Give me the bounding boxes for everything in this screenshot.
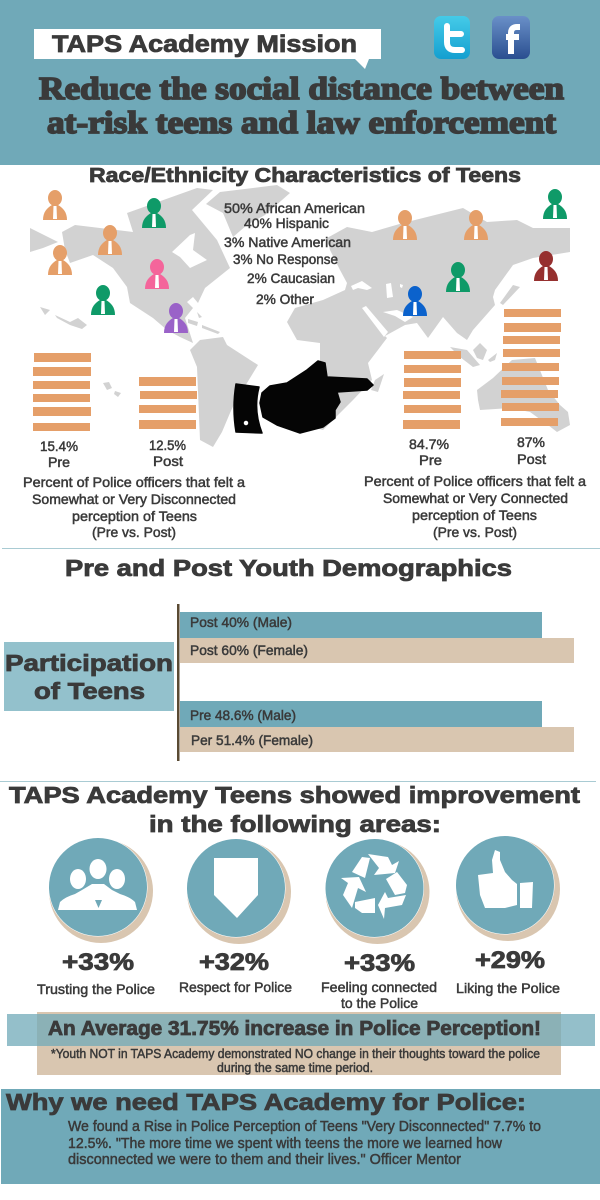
map: inland water <box>172 233 413 337</box>
bar: connected post 87% <box>501 309 561 426</box>
mission statement <box>39 70 564 140</box>
labels: disconnected bars: 12.5% <box>149 437 186 453</box>
caption: disconnected perception: (Pre vs. Post) <box>92 524 176 540</box>
labels: disconnected bars <box>40 437 186 470</box>
icon: twitter <box>434 16 470 59</box>
participation label box: Participation <box>5 650 173 676</box>
metric: feeling connected: to the Police <box>341 995 418 1011</box>
participation label box <box>4 642 174 711</box>
race and ethnicity percentages: 40% Hispanic <box>244 215 329 231</box>
participation bar chart <box>177 604 574 761</box>
footnote: during the same time period. <box>217 1060 373 1075</box>
metric: trusting the police <box>37 838 155 997</box>
metric: liking the police: Liking the Police <box>456 980 560 996</box>
quote paragraph: 12.5%. "The more time we spent with teens the more we learned how <box>68 1135 502 1152</box>
panel: why we need TAPS: Why we need TAPS Academy for Police: <box>6 1089 526 1115</box>
metric: respect for police: Respect for Police <box>179 979 292 995</box>
caption: disconnected perception: perception of Teens <box>72 508 197 524</box>
bar: connected pre 84.7% <box>403 351 461 429</box>
bar: pre female <box>180 727 574 752</box>
metric: feeling connected <box>321 838 437 1011</box>
footnote: *Youth NOT in TAPS Academy demonstrated NO change in their thoughts toward the police <box>51 1046 540 1061</box>
caption: connected perception: perception of Teens <box>412 507 537 523</box>
callout: average increase <box>7 1012 595 1075</box>
bar: disconnected pre 15.4% <box>33 353 91 431</box>
world map <box>30 185 570 447</box>
labels: disconnected bars: Post <box>153 453 183 469</box>
metric: feeling connected: Feeling connected <box>321 979 437 995</box>
icon: recycle arrows <box>341 854 407 919</box>
quote paragraph: We found a Rise in Police Perception of Teens "Very Disconnected" 7.7% to <box>68 1118 541 1135</box>
metric: liking the police <box>456 836 560 996</box>
speech bubble heading: TAPS Academy Mission <box>52 31 357 58</box>
race and ethnicity percentages: 3% No Response <box>233 251 338 267</box>
labels: connected bars: Pre <box>419 452 442 468</box>
caption: disconnected perception <box>23 474 245 540</box>
heading: improvement areas: TAPS Academy Teens showed improvement <box>9 782 580 808</box>
labels: connected bars: Post <box>517 451 546 467</box>
race and ethnicity percentages: 3% Native American <box>224 234 351 250</box>
metric: trusting the police: Trusting the Police <box>37 981 155 997</box>
race and ethnicity percentages: 50% African American <box>224 200 365 216</box>
bar: post male: Post 40% (Male) <box>190 614 292 630</box>
mission statement: at-risk teens and law enforcement <box>47 104 556 140</box>
heading: improvement areas <box>9 782 580 837</box>
bar: pre male <box>180 701 542 727</box>
bar: post female <box>180 638 574 663</box>
metric: feeling connected: +33% <box>344 950 415 977</box>
race and ethnicity percentages: 2% Caucasian <box>247 270 335 286</box>
quote paragraph <box>68 1118 541 1168</box>
labels: connected bars: 84.7% <box>409 436 449 452</box>
speech bubble heading <box>34 29 381 69</box>
bar: post female: Post 60% (Female) <box>190 642 308 658</box>
people markers on map <box>43 189 567 333</box>
footnote <box>51 1046 540 1075</box>
icon: shield <box>214 858 258 918</box>
bar: pre male: Pre 48.6% (Male) <box>190 707 296 723</box>
icon: group of people <box>58 859 137 910</box>
metric: liking the police: +29% <box>475 947 545 974</box>
callout: average increase: An Average 31.75% increase in Police Perception! <box>48 1018 541 1040</box>
caption: connected perception: (Pre vs. Post) <box>433 524 517 540</box>
metric: trusting the police: +33% <box>62 949 134 976</box>
bar: disconnected post 12.5% <box>139 377 197 429</box>
heading: improvement areas: in the following areas: <box>149 811 441 837</box>
bar: post male <box>180 612 542 638</box>
race and ethnicity percentages: 2% Other <box>256 291 314 307</box>
heading: youth demographics: Pre and Post Youth Demographics <box>65 555 512 581</box>
bar: pre female: Per 51.4% (Female) <box>191 732 313 748</box>
labels: disconnected bars: Pre <box>48 454 70 470</box>
panel: why we need TAPS <box>1 1089 600 1184</box>
icon: thumbs up <box>478 850 533 908</box>
caption: connected perception <box>364 473 586 540</box>
heading: race and ethnicity: Race/Ethnicity Characteristics of Teens <box>89 164 521 187</box>
caption: connected perception: Somewhat or Very Connected <box>383 490 568 506</box>
labels: disconnected bars: 15.4% <box>40 438 78 454</box>
metric: respect for police: +32% <box>199 949 269 976</box>
participation label box: of Teens <box>34 678 145 704</box>
labels: connected bars <box>409 434 546 468</box>
header band <box>0 0 600 165</box>
mission statement: Reduce the social distance between <box>39 70 564 106</box>
race and ethnicity percentages <box>224 200 365 307</box>
quote paragraph: disconnected we were to them and their lives." Officer Mentor <box>68 1151 461 1168</box>
caption: disconnected perception: Somewhat or Very Disconnected <box>32 491 236 507</box>
caption: connected perception: Percent of Police officers that felt a <box>364 473 586 489</box>
icon: pointing hand <box>234 361 373 433</box>
caption: disconnected perception: Percent of Police officers that felt a <box>23 474 245 490</box>
labels: connected bars: 87% <box>517 434 545 450</box>
metric: respect for police <box>179 838 292 995</box>
icon: facebook <box>492 16 530 59</box>
